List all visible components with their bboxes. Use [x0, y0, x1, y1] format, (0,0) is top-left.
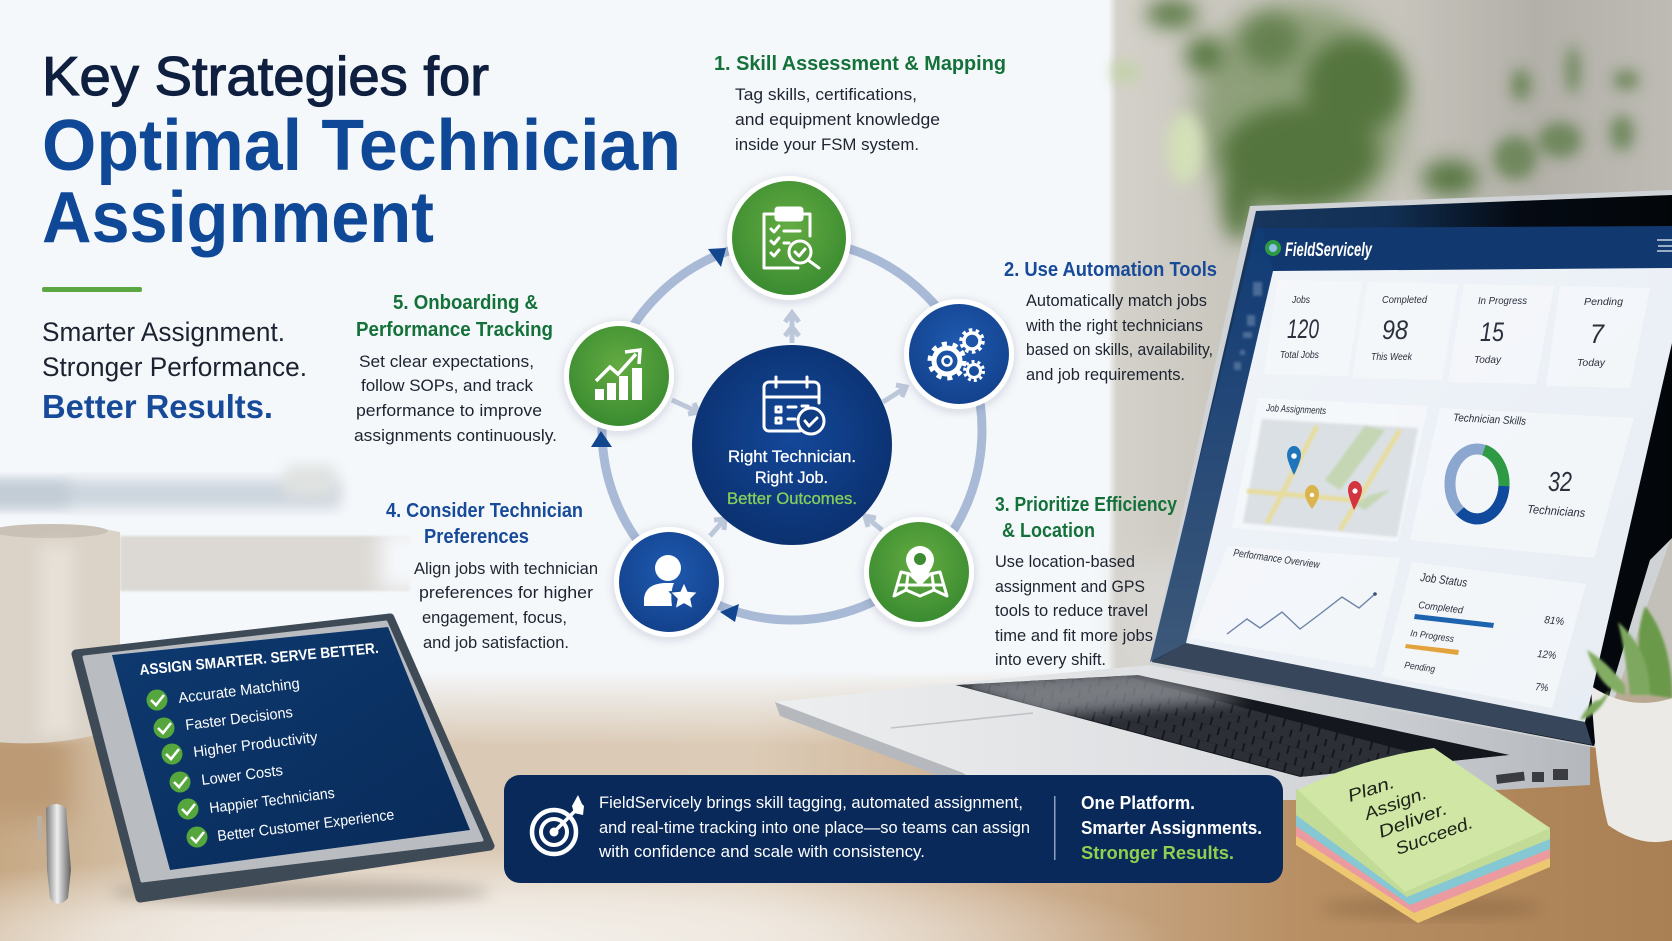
note handwriting: Assign.: [1360, 783, 1429, 824]
checklist: [146, 675, 395, 848]
step 3 text: time and fit more jobs: [995, 626, 1153, 645]
checklist: Lower Costs: [200, 762, 284, 789]
strategy ring: [591, 240, 982, 622]
banner tagline: Stronger Results.: [1081, 843, 1234, 863]
step 2 text: and job requirements.: [1026, 365, 1185, 384]
step 4 text: Preferences: [424, 526, 529, 548]
tablet: [76, 618, 490, 904]
note handwriting: Succeed.: [1393, 812, 1475, 859]
step 5 text: Performance Tracking: [356, 319, 553, 341]
step 3 text: tools to reduce travel: [995, 601, 1148, 620]
spoke arrows: [672, 313, 906, 536]
icon: target with arrow: [532, 795, 584, 854]
banner copy: FieldServicely brings skill tagging, automated assignment,: [599, 793, 1023, 812]
step 3 text: Use location-based: [995, 552, 1135, 571]
job status bars: [1404, 570, 1565, 694]
performance overview chart: Performance Overview: [1233, 547, 1322, 571]
step 2 text: 2. Use Automation Tools: [1004, 259, 1217, 281]
step 5 text: follow SOPs, and track: [361, 376, 533, 395]
step 5 text: assignments continuously.: [354, 426, 557, 445]
step 5 text: performance to improve: [356, 401, 542, 420]
laptop: [775, 190, 1672, 800]
step 1 text: inside your FSM system.: [735, 135, 919, 154]
KPI cards: In Progress: [1478, 295, 1528, 307]
pen: [37, 804, 71, 904]
subtitle: Stronger Performance.: [42, 352, 307, 382]
step 4 text: preferences for higher: [419, 583, 593, 602]
keyboard: [956, 675, 1510, 777]
sidebar icons: [1234, 282, 1262, 370]
KPI cards: Jobs: [1291, 295, 1310, 306]
KPI cards: Today: [1474, 354, 1502, 366]
KPI cards: [1280, 294, 1623, 369]
plant in pot: [1580, 606, 1672, 842]
bottom banner: [504, 775, 1283, 883]
title: Key Strategies for: [42, 45, 489, 107]
technician skills donut: [1450, 412, 1586, 520]
job status bars: Pending: [1404, 660, 1436, 675]
KPI cards: Completed: [1382, 294, 1428, 306]
job status bars: 81%: [1544, 614, 1565, 628]
title: [42, 45, 681, 258]
job status bars: 12%: [1537, 648, 1557, 662]
KPI cards: 15: [1480, 317, 1505, 347]
banner copy: with confidence and scale with consistency.: [598, 842, 925, 861]
step 4 text: engagement, focus,: [422, 608, 567, 627]
step 3 text: [995, 494, 1178, 669]
brand logo: [1265, 240, 1281, 256]
sticky notes: [1296, 748, 1550, 923]
technician skills donut: Technician Skills: [1453, 412, 1527, 428]
title: Optimal Technician: [42, 106, 681, 186]
step 5 text: 5. Onboarding &: [393, 292, 538, 314]
job assignments map: [1243, 403, 1418, 537]
icon: clipboard with magnifier: [764, 208, 819, 268]
checklist: Higher Productivity: [192, 729, 319, 761]
step 4 text: and job satisfaction.: [423, 633, 569, 652]
banner copy: and real-time tracking into one place—so teams can assign: [599, 818, 1030, 837]
green accent bar: [42, 287, 142, 292]
hub text: [727, 447, 857, 508]
laptop base: [775, 665, 1590, 800]
title: Assignment: [42, 178, 434, 258]
step 1 node: clipboard: [727, 176, 851, 300]
step 5 text: [354, 292, 557, 445]
icon: gears: [930, 330, 984, 380]
step 3 text: & Location: [1002, 520, 1095, 542]
note top sheet: [1298, 748, 1550, 892]
step 2 node: gears: [904, 299, 1014, 409]
step 4 text: Align jobs with technician: [414, 559, 598, 578]
step 5 text: Set clear expectations,: [359, 352, 534, 371]
performance overview chart: [1227, 547, 1377, 634]
banner tagline: One Platform.: [1081, 793, 1195, 813]
banner tagline: [1081, 793, 1262, 863]
KPI cards: Today: [1577, 357, 1606, 369]
step 1 text: and equipment knowledge: [735, 110, 940, 129]
subtitle: Smarter Assignment.: [42, 317, 285, 347]
icon: person and star: [644, 555, 698, 609]
screen bezel: [1149, 190, 1672, 748]
KPI cards: This Week: [1371, 351, 1413, 363]
mug: [0, 524, 120, 743]
job status bars: Job Status: [1419, 570, 1468, 590]
step 4 text: [386, 500, 598, 652]
checklist: Accurate Matching: [177, 675, 301, 707]
KPI cards: 120: [1287, 314, 1319, 344]
icon: calendar with check: [764, 377, 824, 434]
KPI cards: 7: [1590, 319, 1605, 349]
hamburger menu: [1657, 240, 1672, 251]
tablet screen: [112, 627, 470, 870]
banner tagline: Smarter Assignments.: [1081, 818, 1262, 838]
step 3 node: map pin: [864, 517, 974, 627]
step 1 text: Tag skills, certifications,: [735, 85, 917, 104]
KPI cards: Total Jobs: [1280, 349, 1320, 361]
ring arrowheads: [591, 248, 739, 622]
note handwriting: Deliver.: [1376, 798, 1450, 842]
checklist: Better Customer Experience: [216, 806, 395, 845]
checklist: Faster Decisions: [184, 704, 294, 734]
step 1 text: 1. Skill Assessment & Mapping: [714, 53, 1006, 75]
step 3 text: 3. Prioritize Efficiency: [995, 494, 1178, 516]
laptop ports: [1496, 769, 1568, 784]
KPI cards: 98: [1382, 315, 1408, 345]
job status bars: In Progress: [1410, 628, 1455, 645]
step 3 text: into every shift.: [995, 650, 1106, 669]
step 2 text: Automatically match jobs: [1026, 291, 1207, 310]
job status bars: 7%: [1535, 681, 1549, 694]
note handwriting: Plan.: [1345, 772, 1397, 806]
hub text: Better Outcomes.: [727, 489, 857, 508]
tablet heading: ASSIGN SMARTER. SERVE BETTER.: [139, 640, 379, 679]
center hub: [692, 345, 892, 545]
step 2 text: [1004, 259, 1217, 384]
icon: bar chart with arrow: [595, 350, 642, 400]
technician skills donut: Technicians: [1527, 502, 1586, 520]
step 1 text: [714, 53, 1006, 154]
step 2 text: based on skills, availability,: [1026, 340, 1213, 359]
brand name: FieldServicely: [1285, 240, 1373, 261]
subtitle: Better Results.: [42, 388, 273, 425]
step 4 node: person with star: [614, 527, 724, 637]
screen: [1186, 268, 1672, 722]
subtitle: [42, 317, 307, 425]
checklist: Happier Technicians: [208, 785, 336, 817]
technician skills donut: 32: [1548, 466, 1572, 497]
step 4 text: 4. Consider Technician: [386, 500, 583, 522]
step 2 text: with the right technicians: [1025, 316, 1203, 335]
banner copy: [598, 793, 1030, 861]
dashboard cards: [1190, 280, 1650, 708]
job status bars: Completed: [1418, 600, 1464, 617]
hub text: Right Job.: [755, 468, 828, 487]
job assignments map: Job Assignments: [1265, 403, 1326, 417]
note handwriting: [1345, 772, 1475, 859]
icon: map and pin: [894, 546, 947, 596]
KPI cards: Pending: [1584, 296, 1623, 308]
step 3 text: assignment and GPS: [995, 577, 1145, 596]
step 5 node: growth chart: [564, 321, 674, 431]
hub text: Right Technician.: [728, 447, 856, 466]
